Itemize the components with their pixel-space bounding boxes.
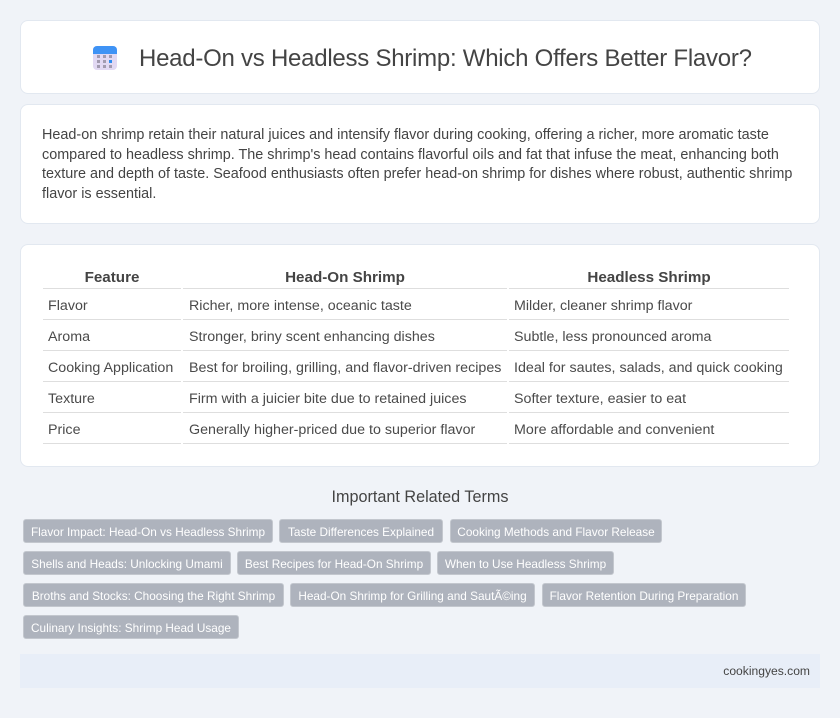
row: price: Generally higher-priced due to superior flavor xyxy=(189,422,475,438)
tag xyxy=(23,551,231,575)
row: cooking application: Cooking Application xyxy=(48,360,173,376)
tag xyxy=(23,615,239,639)
row: flavor: Flavor xyxy=(48,298,88,314)
tag xyxy=(279,519,443,543)
tag xyxy=(237,551,431,575)
panel: title card xyxy=(20,20,820,94)
row: texture xyxy=(48,391,686,407)
tag xyxy=(450,519,662,543)
row: cooking application xyxy=(48,360,783,376)
tag: Shells and Heads: Unlocking Umami xyxy=(31,557,223,571)
table header: feature: Feature xyxy=(85,269,139,286)
tag: Broths and Stocks: Choosing the Right Shrimp xyxy=(32,589,275,603)
row: aroma: Aroma xyxy=(48,329,90,345)
tag: When to Use Headless Shrimp xyxy=(445,557,606,571)
row: texture: Firm with a juicier bite due to retained juices xyxy=(189,391,467,407)
title: Head-On vs Headless Shrimp: Which Offers Better Flavor? xyxy=(139,45,752,72)
tag: Culinary Insights: Shrimp Head Usage xyxy=(31,621,231,635)
tag: Head-On Shrimp for Grilling and SautÃ©ing xyxy=(298,589,527,603)
tag xyxy=(542,583,746,607)
row: price xyxy=(48,422,714,438)
row: flavor: Milder, cleaner shrimp flavor xyxy=(514,298,692,314)
row: aroma: Stronger, briny scent enhancing dishes xyxy=(189,329,435,345)
row: price: Price xyxy=(48,422,81,438)
heading: important related terms: Important Related Terms xyxy=(332,488,508,506)
text block: introduction: flavor is essential. xyxy=(42,186,156,202)
tag: Best Recipes for Head-On Shrimp xyxy=(245,557,423,571)
row: flavor xyxy=(48,298,692,314)
row: price: More affordable and convenient xyxy=(514,422,714,438)
row: aroma: Subtle, less pronounced aroma xyxy=(514,329,711,345)
table header: head-on shrimp: Head-On Shrimp xyxy=(285,269,405,286)
tag list: related terms xyxy=(23,519,746,639)
text block: introduction: texture and depth of taste. Seafood enthusiasts often prefer head-on shrimp for dishes where robust, authentic shrimp xyxy=(42,166,792,182)
comparison table xyxy=(43,288,789,444)
row: cooking application: Best for broiling, grilling, and flavor-driven recipes xyxy=(189,360,501,376)
row: texture: Softer texture, easier to eat xyxy=(514,391,686,407)
tag: Cooking Methods and Flavor Release xyxy=(457,525,655,539)
footer bar xyxy=(20,654,820,688)
text block: introduction xyxy=(42,127,792,202)
tag: Flavor Impact: Head-On vs Headless Shrimp xyxy=(31,525,265,539)
tag: Taste Differences Explained xyxy=(288,525,434,539)
tag xyxy=(23,519,273,543)
table header: headless shrimp: Headless Shrimp xyxy=(587,269,711,286)
row: flavor: Richer, more intense, oceanic taste xyxy=(189,298,412,314)
row: texture: Texture xyxy=(48,391,95,407)
row: aroma xyxy=(48,329,712,345)
text block: introduction: compared to headless shrimp. The shrimp's head contains flavorful oils and fat that infuse the meat, enhancing both xyxy=(42,147,779,163)
footer credit: cookingyes.com xyxy=(723,664,810,678)
tag xyxy=(290,583,535,607)
tag: Flavor Retention During Preparation xyxy=(550,589,738,603)
text block: introduction: Head-on shrimp retain their natural juices and intensify flavor during cooking, offering a richer, more aromatic taste xyxy=(42,127,769,143)
panel: introduction xyxy=(20,104,820,224)
icon: calendar xyxy=(93,46,117,70)
tag xyxy=(23,583,284,607)
tag xyxy=(437,551,614,575)
panel: comparison table xyxy=(20,244,820,467)
row: cooking application: Ideal for sautes, salads, and quick cooking xyxy=(514,360,783,376)
